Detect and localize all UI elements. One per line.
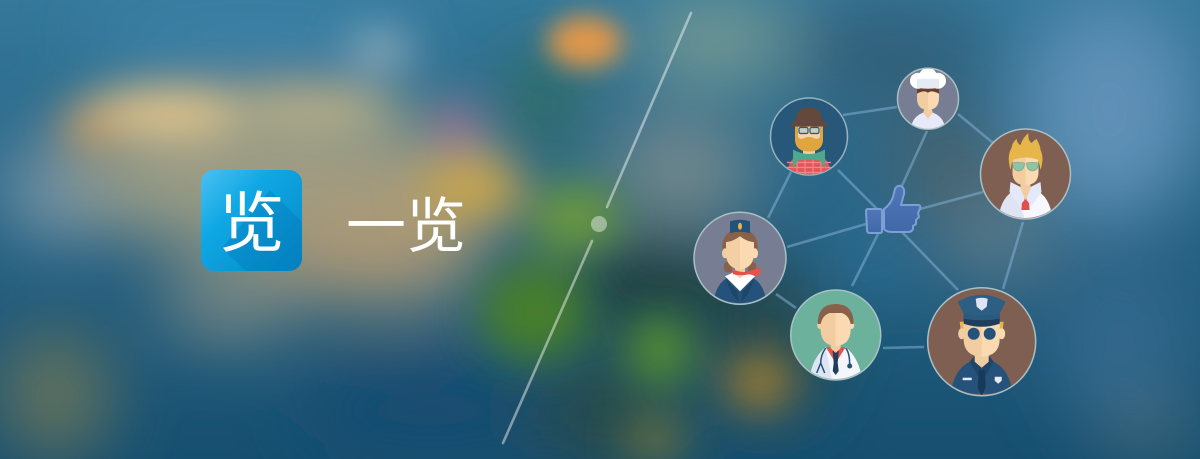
avatar: chef [898,68,958,129]
app logo icon: 览 [218,186,284,260]
avatar: blond man [980,129,1070,219]
icon: thumbs up [866,186,920,233]
avatar: doctor [791,290,881,380]
app logo icon [201,170,302,271]
diagonal divider [503,13,691,443]
avatar: flight attendant [694,212,786,308]
network connection lines [768,107,1023,348]
avatar: hipster [770,98,848,175]
avatar: police officer [928,288,1036,396]
brand name: 一览 [346,193,466,260]
